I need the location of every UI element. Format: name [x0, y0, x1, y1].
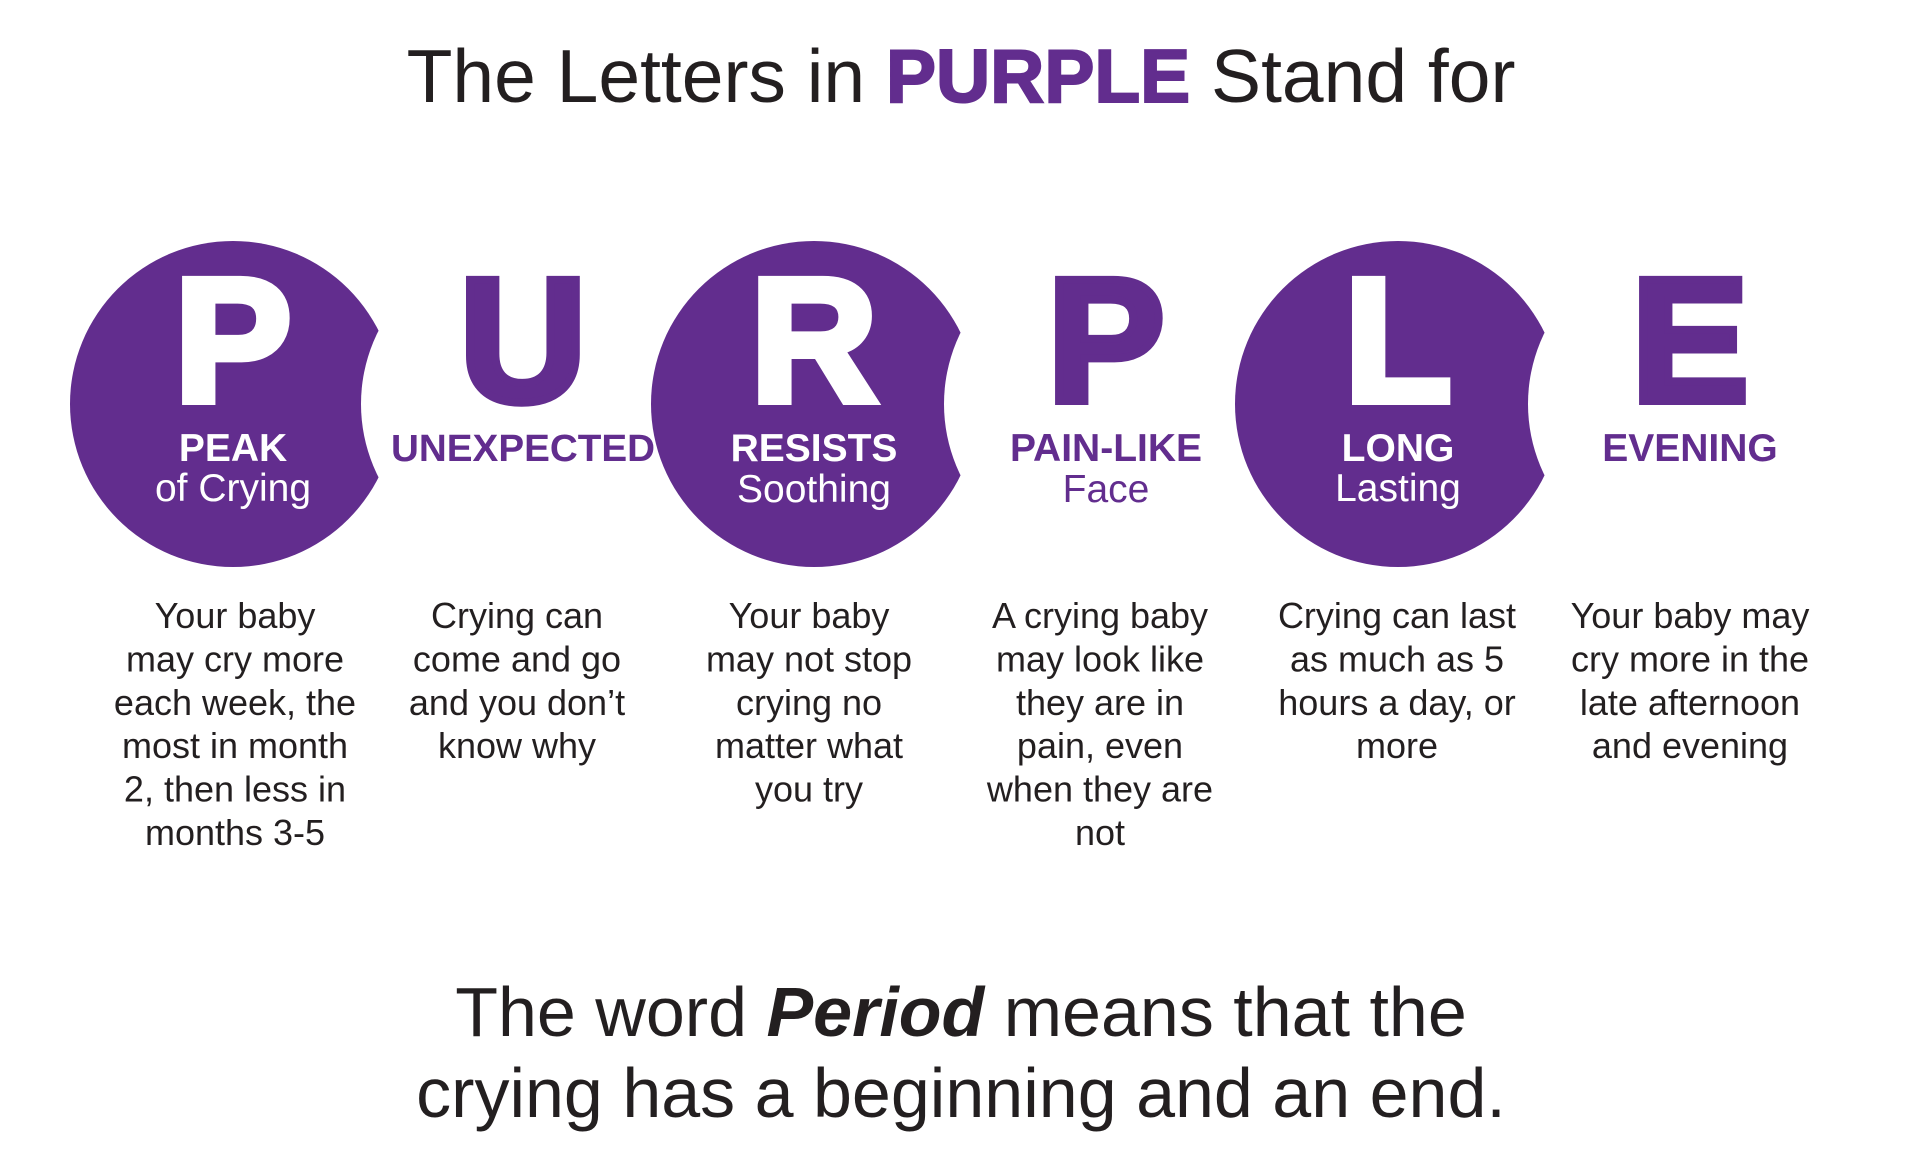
- label: Resists Soothing: RESISTS: [731, 427, 897, 470]
- label: Peak of Crying: PEAK: [179, 427, 287, 470]
- circle: R: [651, 241, 977, 567]
- label: Peak of Crying: of Crying: [155, 467, 311, 510]
- descriptions: [114, 595, 1809, 853]
- text: pain-like description: pain, even: [1017, 725, 1183, 766]
- text: peak description: each week, the: [114, 682, 356, 723]
- text: unexpected description: and you don’t: [409, 682, 625, 723]
- text: long description: hours a day, or: [1278, 682, 1516, 723]
- letter: L: L: [1344, 243, 1452, 439]
- footer statement: The word Period means that the: [455, 973, 1467, 1051]
- letter: P: P: [1047, 243, 1165, 439]
- column: R resists: [651, 241, 1268, 567]
- label: Long Lasting: Lasting: [1335, 467, 1461, 510]
- text: long description: as much as 5: [1290, 638, 1504, 679]
- label: Resists Soothing: Soothing: [737, 468, 891, 511]
- label: Evening: EVENING: [1602, 427, 1778, 470]
- column: U unexpected: [391, 243, 655, 470]
- text: resists description: Your baby: [729, 595, 889, 636]
- letter: P: P: [174, 243, 292, 439]
- text: evening description: late afternoon: [1580, 682, 1800, 723]
- letter: R: R: [750, 243, 878, 439]
- text: pain-like description: not: [1075, 812, 1125, 853]
- text: resists description: crying no: [736, 682, 882, 723]
- text: long description: more: [1356, 725, 1438, 766]
- label: Unexpected: UNEXPECTED: [391, 428, 655, 470]
- text: unexpected description: Crying can: [431, 595, 603, 636]
- text: peak description: Your baby: [155, 595, 315, 636]
- text: pain-like description: may look like: [996, 638, 1204, 679]
- title: The Letters in PURPLE Stand for: [407, 34, 1515, 118]
- text: peak description: most in month: [122, 725, 348, 766]
- text: peak description: months 3-5: [145, 812, 325, 853]
- text: pain-like description: when they are: [986, 769, 1213, 810]
- text: peak description: 2, then less in: [124, 769, 346, 810]
- label: Long Lasting: LONG: [1342, 427, 1454, 470]
- text: resists description: matter what: [715, 725, 903, 766]
- text: long description: Crying can last: [1278, 595, 1516, 636]
- text: unexpected description: know why: [438, 725, 596, 766]
- text: pain-like description: A crying baby: [992, 595, 1208, 636]
- column: P peak: [70, 241, 685, 567]
- column: L long: [1235, 241, 1852, 567]
- text: unexpected description: come and go: [413, 638, 621, 679]
- text: evening description: cry more in the: [1571, 638, 1809, 679]
- label: Pain-like Face: PAIN-LIKE: [1010, 427, 1202, 470]
- footer statement: crying has a beginning and an end.: [416, 1054, 1506, 1132]
- text: resists description: may not stop: [706, 638, 912, 679]
- label: Pain-like Face: Face: [1063, 468, 1149, 511]
- text: resists description: you try: [755, 769, 863, 810]
- text: evening description: and evening: [1592, 725, 1788, 766]
- text: evening description: Your baby may: [1571, 595, 1809, 636]
- letter: U: U: [459, 243, 587, 439]
- text: peak description: may cry more: [126, 638, 344, 679]
- circle: L: [1235, 241, 1561, 567]
- text: pain-like description: they are in: [1016, 682, 1184, 723]
- column: E evening: [1602, 243, 1778, 470]
- letter: E: E: [1631, 243, 1749, 439]
- column: P pain-like: [1010, 243, 1202, 511]
- circle: P: [70, 241, 396, 567]
